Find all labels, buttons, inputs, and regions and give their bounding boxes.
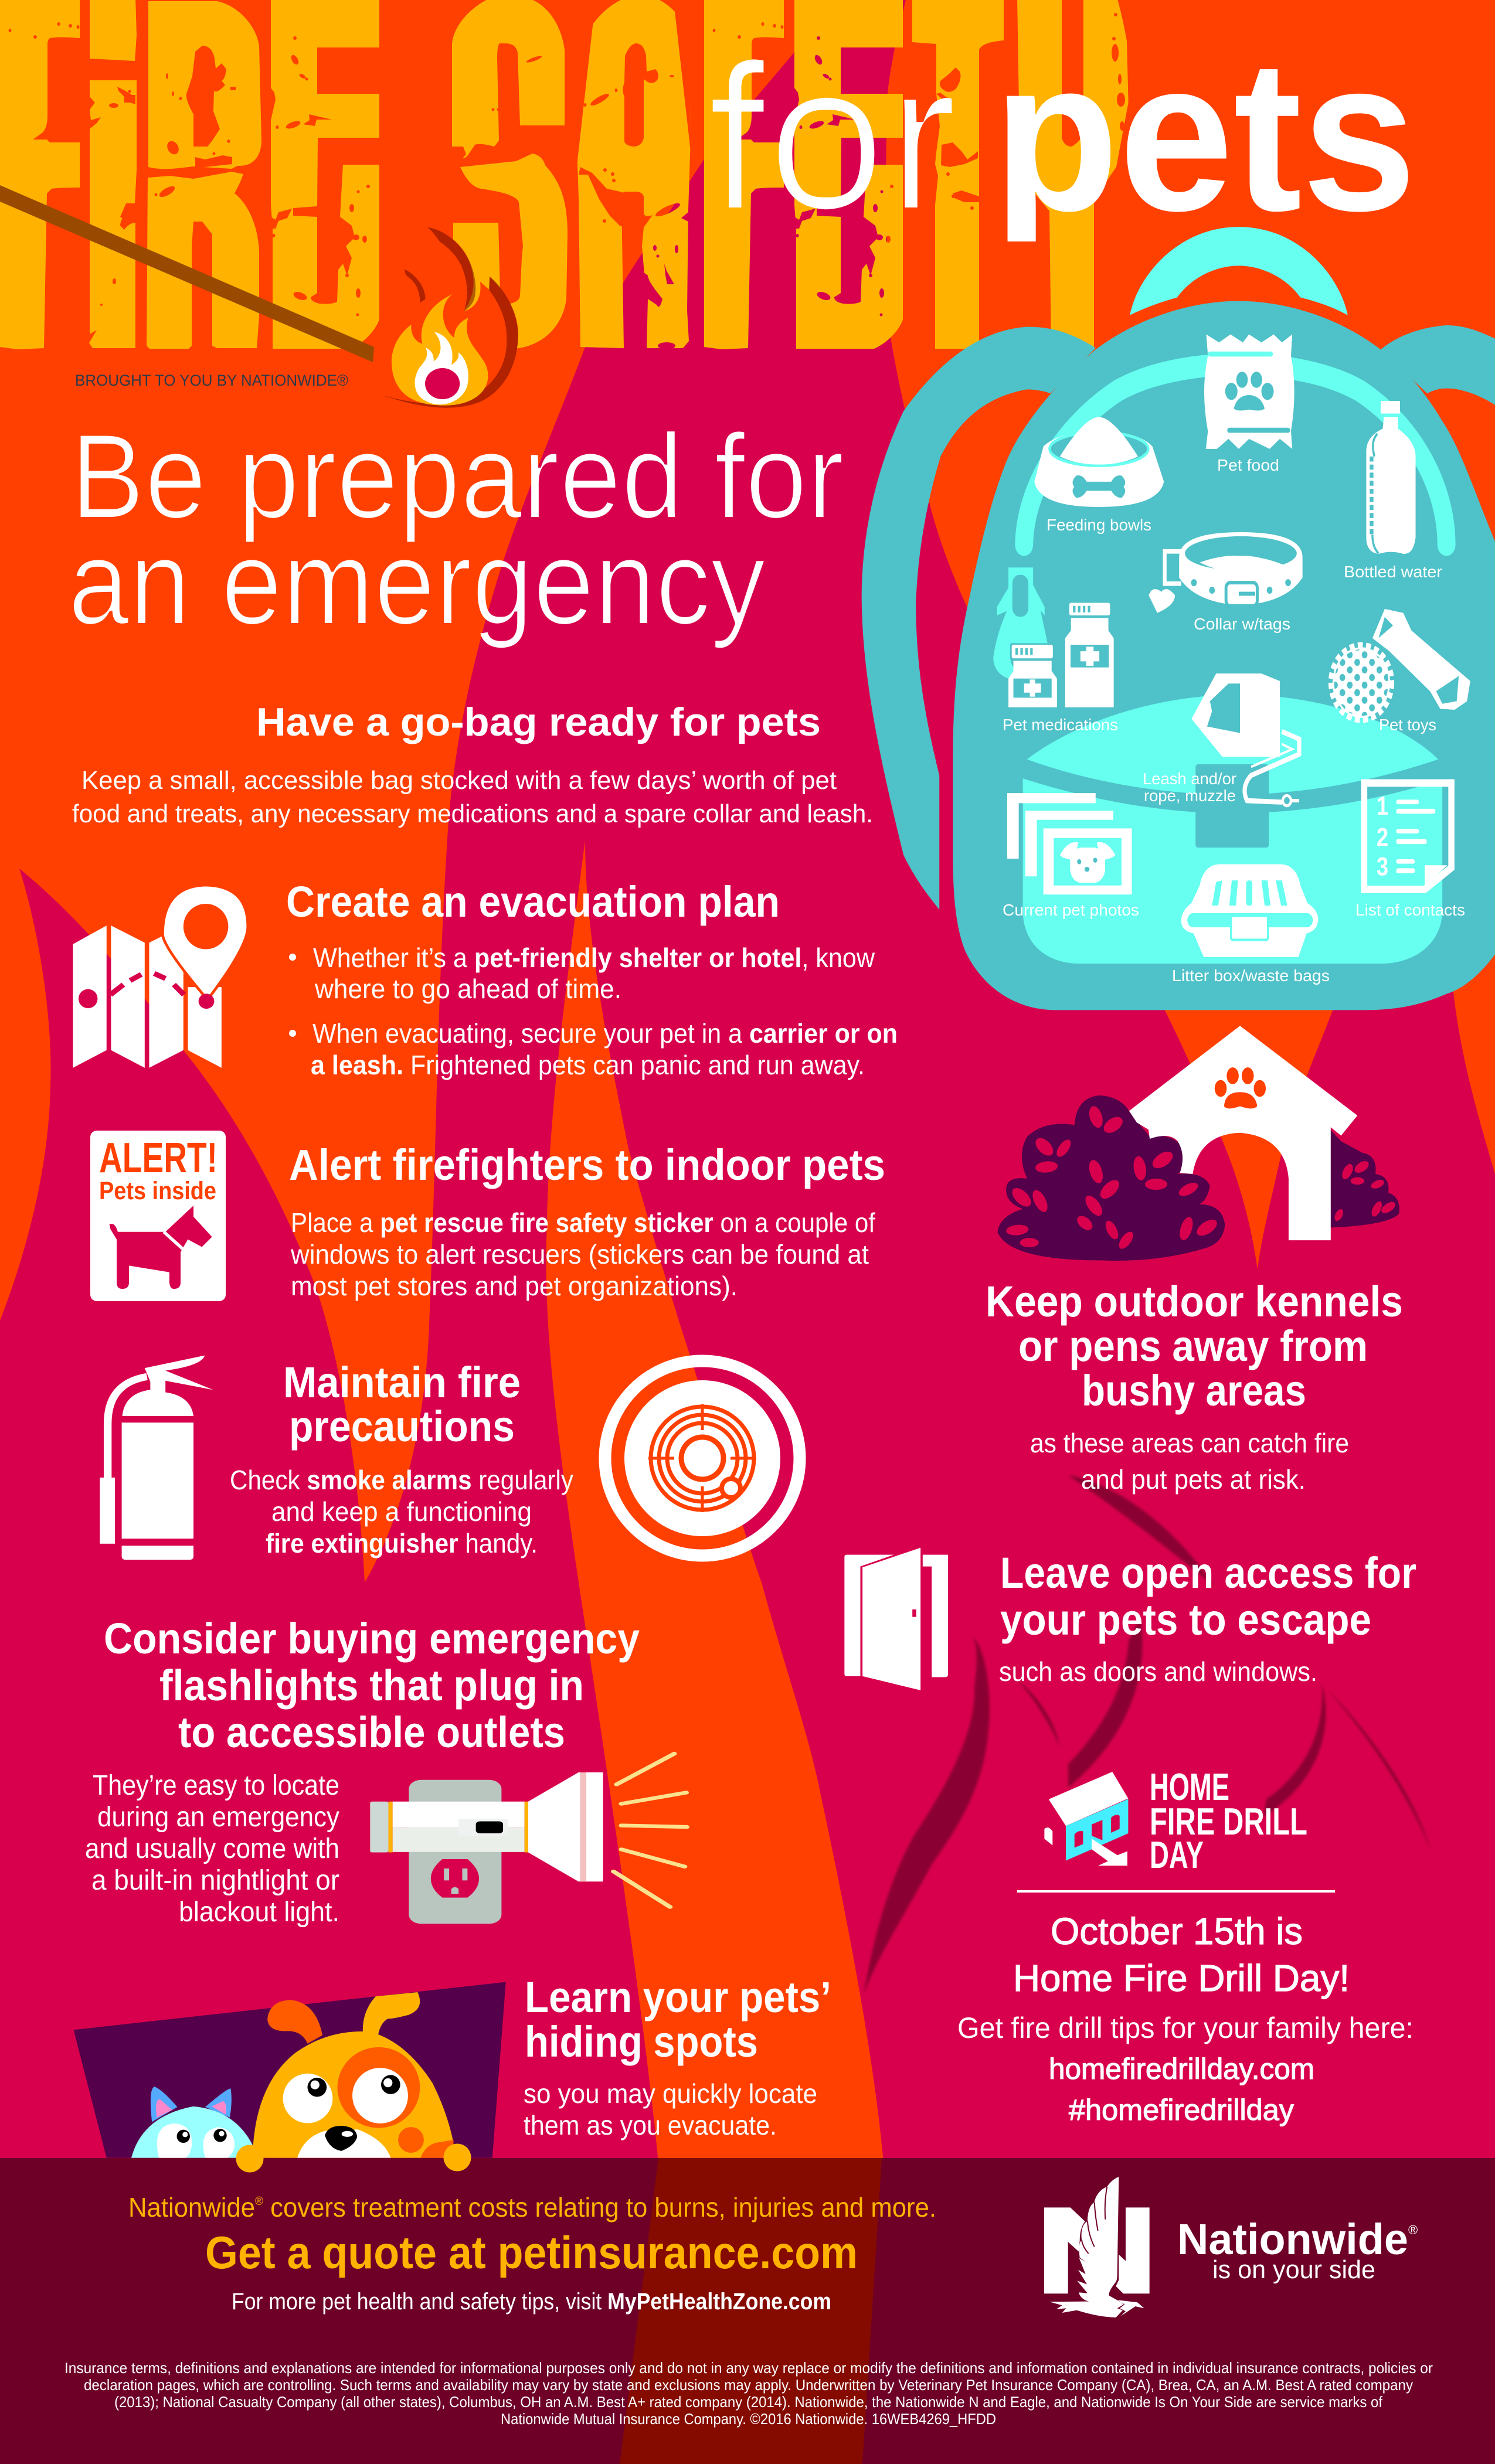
backpack labels: Pet medications bbox=[1003, 716, 1118, 734]
section: open access bbox=[999, 1548, 1416, 1687]
backpack labels: Litter box/waste bags bbox=[1172, 966, 1330, 985]
icon: contacts list: 2 bbox=[1377, 822, 1388, 852]
footer: Nationwide wordmark: ® bbox=[1408, 2223, 1418, 2237]
icon: contacts list: 3 bbox=[1377, 852, 1388, 881]
section: evacuation plan: where to go ahead of time. bbox=[314, 974, 621, 1004]
section: evacuation plan: When evacuating, secure your pet in a carrier or on bbox=[312, 1018, 898, 1049]
section: flashlights bbox=[85, 1614, 640, 1928]
icon: open door bbox=[844, 1548, 948, 1690]
footer: Nationwide wordmark: Nationwide bbox=[1177, 2215, 1408, 2264]
footer: call to action: covers treatment costs relating to burns, injuries and more. bbox=[263, 2192, 936, 2223]
section: flashlights: Consider buying emergency bbox=[104, 1614, 640, 1663]
backpack labels: Feeding bowls bbox=[1046, 516, 1151, 534]
section: fire precautions: fire extinguisher handy. bbox=[266, 1528, 538, 1558]
icon: dog bbox=[253, 1992, 453, 2158]
section: home fire drill day: October 15th is bbox=[1051, 1910, 1303, 1952]
section: flashlights: a built-in nightlight or bbox=[91, 1865, 339, 1896]
icon: alert sticker: ALERT! bbox=[99, 1135, 218, 1182]
icon: home fire drill house bbox=[1044, 1772, 1128, 1866]
icon: left bush bbox=[997, 1095, 1225, 1261]
section: fire precautions bbox=[230, 1358, 573, 1558]
section: fire precautions: Maintain fire bbox=[283, 1358, 521, 1407]
section: evacuation plan: Create an evacuation plan bbox=[286, 877, 780, 926]
section: flashlights: and usually come with bbox=[85, 1833, 339, 1864]
section: home fire drill day: #homefiredrillday bbox=[1069, 2094, 1294, 2126]
footer: legal text: declaration pages, which are controlling. Such terms and availability may vary by state and exclusions may apply. Underwritten by Veterinary Pet Insurance Company (CA), Brea, CA, an A.M. Best A rated company bbox=[84, 2376, 1413, 2394]
icon: plug-in flashlight bbox=[370, 1754, 687, 1924]
icon: pet food bag bbox=[1204, 334, 1294, 449]
icon: pet paws on footer edge bbox=[236, 2144, 471, 2172]
section: go-bag: Have a go-bag ready for pets bbox=[256, 700, 821, 744]
backpack labels: Current pet photos bbox=[1003, 901, 1139, 919]
section: outdoor kennels: bushy areas bbox=[1082, 1366, 1306, 1415]
icon: collar with tag bbox=[1149, 532, 1303, 613]
section: outdoor kennels: as these areas can catch fire bbox=[1030, 1428, 1349, 1458]
footer: legal text: Insurance terms, definitions and explanations are intended for informational purposes only and do not in any way replace or modify the definitions and information contained in individual insurance contracts, policies or bbox=[64, 2359, 1433, 2377]
panel: footer bbox=[0, 2158, 1495, 2464]
section: hiding spots: so you may quickly locate bbox=[524, 2078, 817, 2109]
backpack labels: rope, muzzle bbox=[1144, 787, 1236, 805]
icon: smoke alarm bbox=[605, 1361, 800, 1556]
section: fire precautions: and keep a functioning bbox=[271, 1496, 532, 1527]
section: home fire drill day bbox=[957, 1765, 1414, 2126]
icon: pocket flap bbox=[1027, 695, 1438, 795]
icon: alert sticker bbox=[90, 1131, 226, 1301]
section: outdoor kennels: or pens away from bbox=[1018, 1322, 1368, 1370]
section: home fire drill day: Home Fire Drill Day! bbox=[1013, 1957, 1350, 1999]
section: outdoor kennels: Keep outdoor kennels bbox=[986, 1277, 1403, 1326]
title: for: for bbox=[706, 21, 959, 252]
icon: medications bbox=[993, 567, 1114, 707]
icon: fire extinguisher bbox=[100, 1356, 213, 1560]
footer: legal text: (2013); National Casualty Company (all other states), Columbus, OH an A.M. Best A+ rated company (2014). Nationwide, the Nationwide N and Eagle, and Nationwide Is On Your Side are service marks of bbox=[114, 2393, 1383, 2411]
section: hiding spots: Learn your pets’ bbox=[525, 1973, 831, 2021]
section: go-bag bbox=[72, 700, 873, 828]
icon: carrier bbox=[1181, 865, 1318, 957]
panel: backpack bbox=[862, 227, 1495, 1010]
icon: alert sticker: Pets inside bbox=[99, 1177, 216, 1205]
icon: kennel paw bbox=[1215, 1067, 1266, 1108]
footer: legal text bbox=[64, 2359, 1433, 2428]
section: alert firefighters: most pet stores and pet organizations). bbox=[291, 1271, 738, 1301]
section: alert firefighters: windows to alert rescuers (stickers can be found at bbox=[290, 1239, 869, 1270]
backpack labels: Bottled water bbox=[1344, 563, 1442, 581]
icon: water bottle bbox=[1366, 401, 1416, 554]
icon: pocket buckle bbox=[1195, 764, 1269, 848]
footer: Nationwide wordmark: is on your side bbox=[1212, 2255, 1375, 2284]
section: fire precautions: precautions bbox=[289, 1402, 515, 1451]
section: home fire drill day: DAY bbox=[1150, 1833, 1204, 1876]
section: flashlights: to accessible outlets bbox=[178, 1708, 565, 1757]
section: outdoor kennels: and put pets at risk. bbox=[1081, 1464, 1306, 1495]
section: alert firefighters bbox=[289, 1141, 885, 1301]
section: open access: such as doors and windows. bbox=[999, 1656, 1317, 1687]
footer: call to action: For more pet health and safety tips, visit MyPetHealthZone.com bbox=[232, 2289, 831, 2315]
backpack labels: Collar w/tags bbox=[1194, 615, 1290, 633]
heading: be prepared bbox=[68, 410, 844, 649]
title: pets: pets bbox=[993, 15, 1416, 257]
footer: call to action bbox=[128, 2192, 936, 2315]
section: flashlights: during an emergency bbox=[97, 1802, 339, 1833]
icon: map with pin bbox=[73, 885, 248, 1068]
section: open access: your pets to escape bbox=[1000, 1595, 1371, 1644]
icon: right bush bbox=[1328, 1127, 1399, 1228]
icon: kennel bbox=[1129, 1026, 1357, 1240]
sponsor line: BROUGHT TO YOU BY NATIONWIDE® bbox=[75, 372, 348, 389]
icon: inner arc bbox=[1024, 365, 1446, 545]
section: alert firefighters: Alert firefighters to indoor pets bbox=[289, 1141, 885, 1189]
footer: call to action: ® bbox=[255, 2195, 263, 2208]
icon: backpack body bbox=[953, 301, 1495, 1010]
section: alert firefighters: Place a pet rescue fire safety sticker on a couple of bbox=[291, 1207, 875, 1238]
icon: leash bbox=[1191, 673, 1299, 806]
section: go-bag: food and treats, any necessary medications and a spare collar and leash. bbox=[72, 799, 873, 828]
icon: cat bbox=[131, 2087, 253, 2158]
backpack labels: Leash and/or bbox=[1143, 770, 1236, 788]
section: hiding spots: hiding spots bbox=[525, 2017, 758, 2066]
section: home fire drill day: HOME bbox=[1150, 1765, 1229, 1808]
icon: pocket bbox=[1023, 778, 1442, 964]
icon: pet toys bbox=[1331, 609, 1470, 720]
section: outdoor kennels bbox=[986, 1277, 1403, 1495]
icon: contacts list bbox=[1364, 783, 1452, 890]
icon: pet photos bbox=[1007, 793, 1132, 894]
section: open access: Leave open access for bbox=[1000, 1548, 1416, 1597]
section: home fire drill day: Get fire drill tips for your family here: bbox=[957, 2012, 1414, 2044]
section: fire precautions: Check smoke alarms regularly bbox=[230, 1465, 573, 1495]
icon: bush leaves bbox=[1005, 1104, 1397, 1251]
icon: backpack handle bbox=[1130, 227, 1348, 315]
section: home fire drill day: FIRE DRILL bbox=[1150, 1800, 1307, 1843]
footer: legal text: Nationwide Mutual Insurance Company. ©2016 Nationwide. 16WEB4269_HFDD bbox=[501, 2410, 996, 2428]
section: flashlights: flashlights that plug in bbox=[159, 1661, 584, 1710]
illustration: hiding pets bbox=[74, 1982, 506, 2158]
background: dark flame shadows bbox=[864, 1475, 1431, 1996]
section: hiding spots: them as you evacuate. bbox=[524, 2110, 777, 2140]
icon: Nationwide logo bbox=[1044, 2177, 1150, 2317]
section: evacuation plan bbox=[286, 877, 898, 1080]
backpack labels: List of contacts bbox=[1355, 901, 1465, 919]
icon: contacts list: 1 bbox=[1377, 791, 1388, 821]
section: go-bag: Keep a small, accessible bag stocked with a few days’ worth of pet bbox=[81, 766, 837, 795]
section: evacuation plan: a leash. Frightened pets can panic and run away. bbox=[311, 1050, 865, 1080]
heading: be prepared: an emergency bbox=[68, 516, 766, 649]
section: flashlights: They’re easy to locate bbox=[93, 1770, 339, 1801]
backpack labels: Pet toys bbox=[1379, 716, 1436, 734]
section: home fire drill day: homefiredrillday.com bbox=[1049, 2053, 1314, 2085]
icon: backpack straps bbox=[862, 325, 1495, 910]
icon: feeding bowl bbox=[1034, 417, 1164, 507]
section: evacuation plan: Whether it’s a pet-friendly shelter or hotel, know bbox=[313, 942, 875, 973]
footer: call to action: Nationwide bbox=[128, 2192, 262, 2223]
footer: call to action: Get a quote at petinsurance.com bbox=[205, 2227, 858, 2278]
backpack labels: Pet food bbox=[1217, 456, 1279, 474]
section: flashlights: blackout light. bbox=[179, 1897, 339, 1928]
illustration: kennel and bushes bbox=[997, 1026, 1399, 1261]
footer: Nationwide wordmark bbox=[1177, 2215, 1418, 2284]
backpack labels bbox=[1003, 456, 1465, 985]
icon: match flame bbox=[380, 227, 518, 409]
heading: be prepared: Be prepared for bbox=[70, 410, 844, 543]
icon: matchstick bbox=[0, 185, 374, 362]
section: hiding spots bbox=[524, 1973, 831, 2140]
